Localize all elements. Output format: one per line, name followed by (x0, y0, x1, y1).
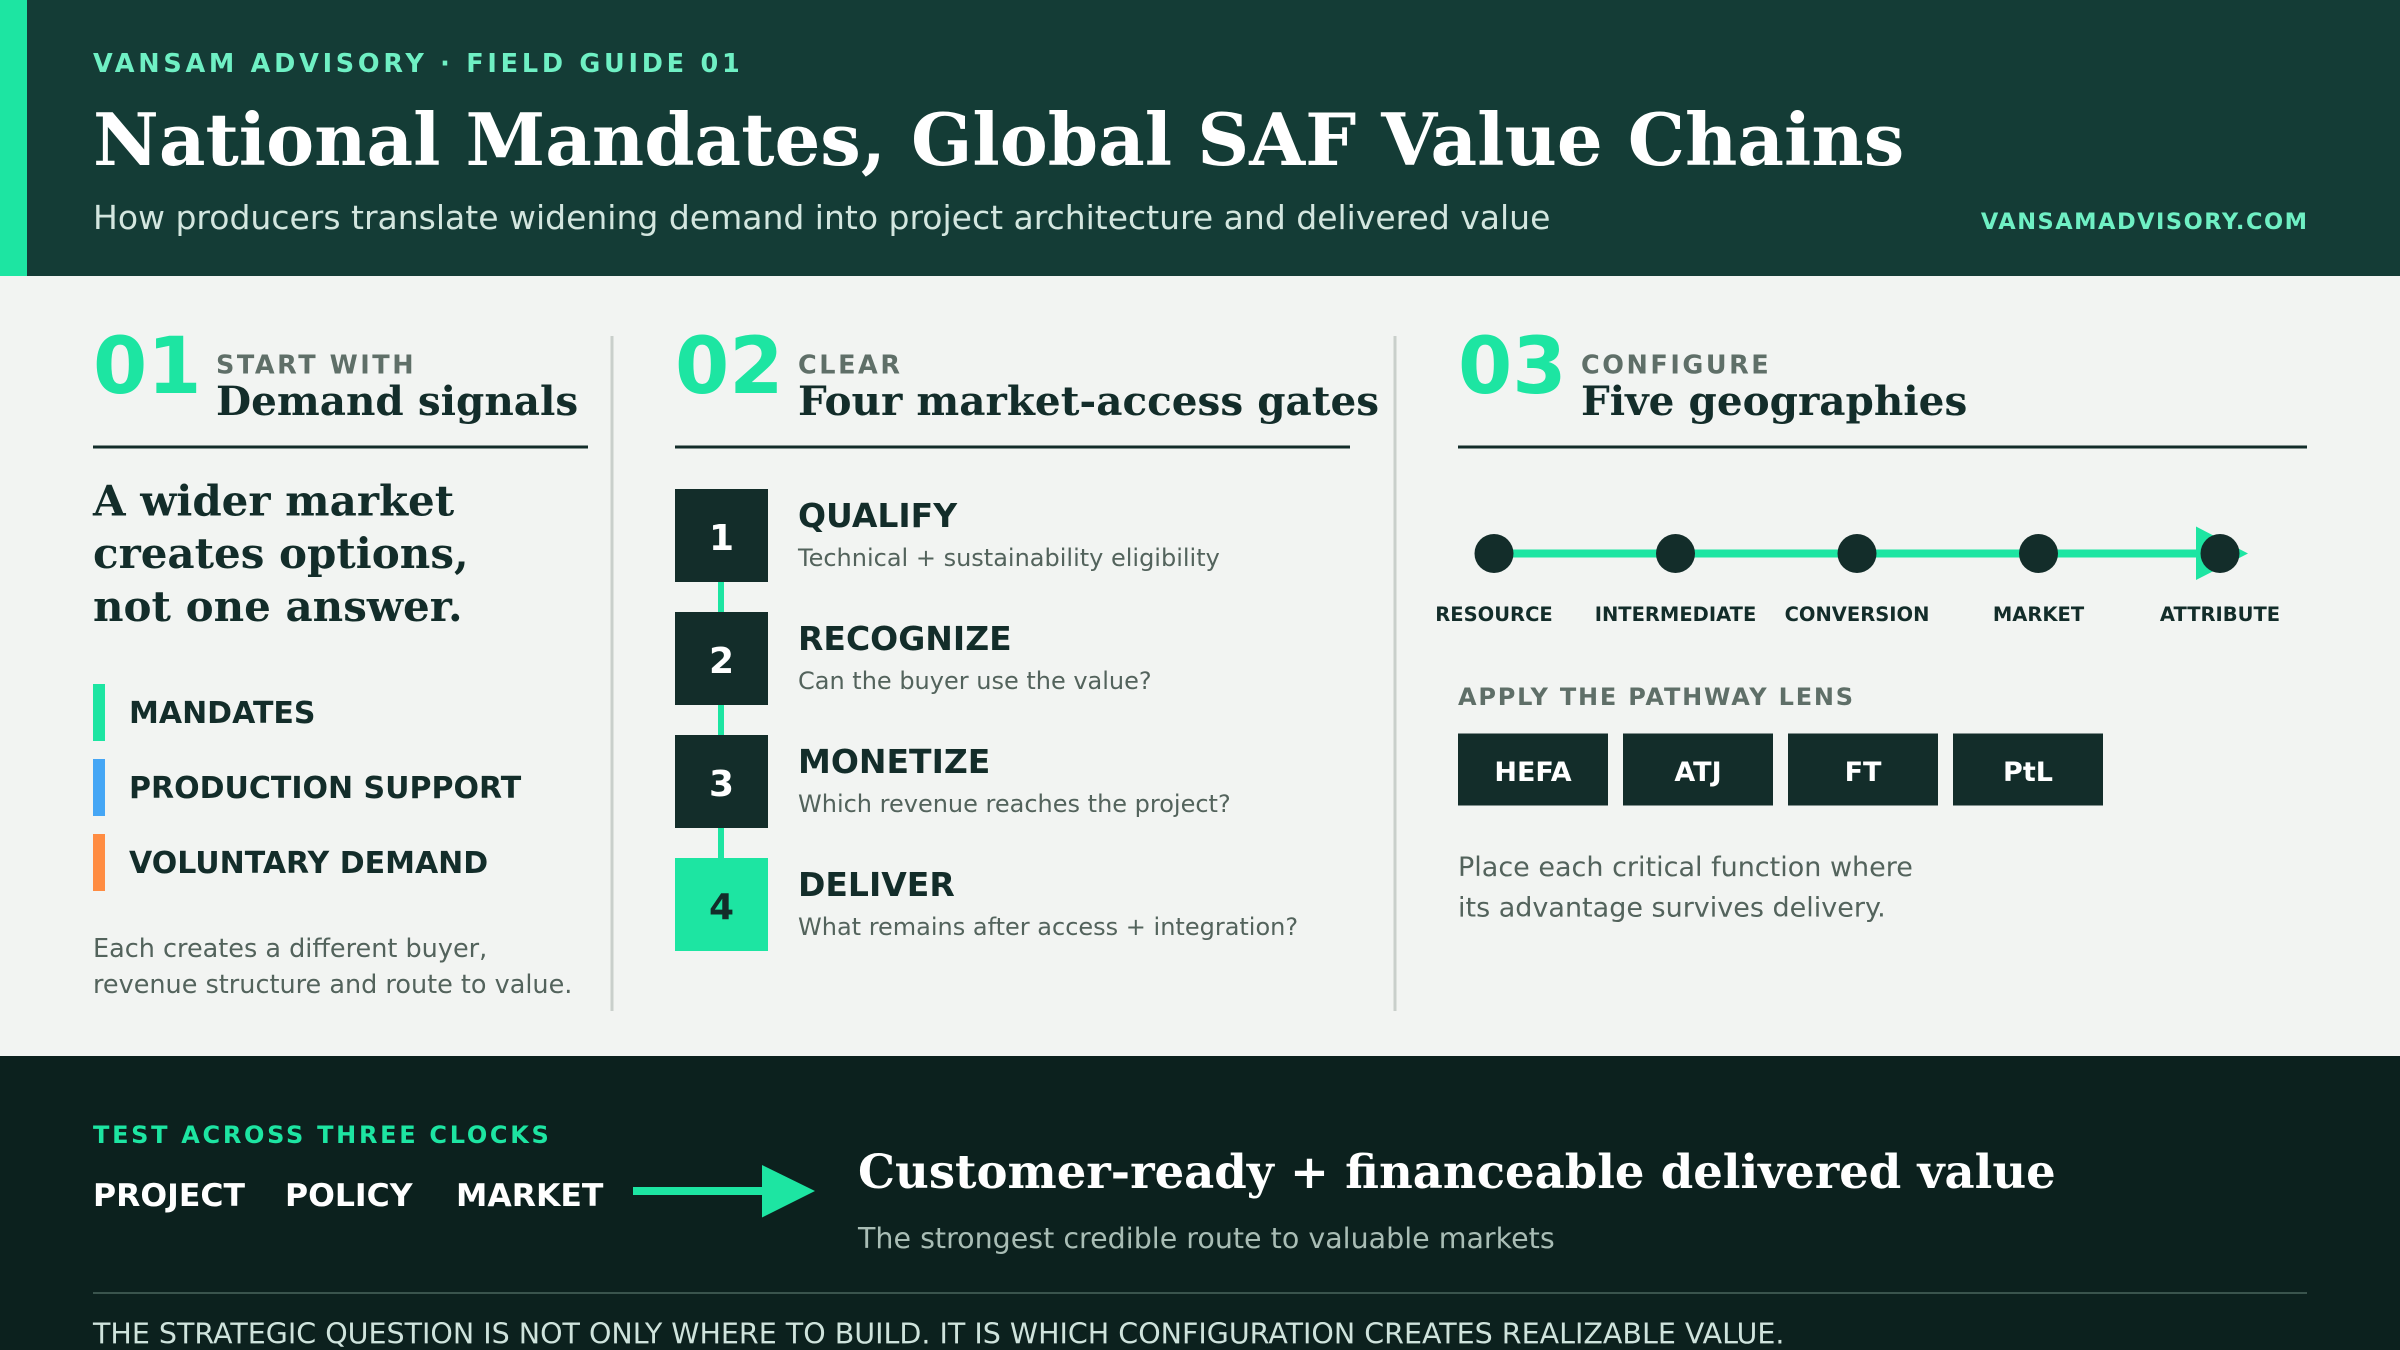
eyebrow: VANSAM ADVISORY · FIELD GUIDE 01 (93, 49, 743, 79)
value chain line (1474, 526, 2248, 580)
gate 1 (675, 489, 1220, 582)
section 02 heading: CLEAR (798, 350, 903, 380)
value chain labels: ATTRIBUTE (2160, 603, 2280, 626)
value chain labels (1435, 603, 2280, 626)
outcome subline: The strongest credible route to valuable markets (857, 1222, 1555, 1255)
clocks label: TEST ACROSS THREE CLOCKS (93, 1121, 552, 1149)
gate 4: 4 (709, 887, 734, 928)
signal: voluntary demand (93, 834, 488, 891)
value chain labels: INTERMEDIATE (1595, 603, 1756, 626)
gate 3: 3 (709, 764, 734, 805)
gate 1: Technical + sustainability eligibility (797, 544, 1220, 572)
statement: A wider market (92, 476, 455, 526)
note: revenue structure and route to value. (93, 970, 572, 1000)
header band (0, 0, 2400, 276)
pathway chips (1458, 734, 2103, 806)
gate 1: 1 (709, 518, 734, 559)
section 03 heading: CONFIGURE (1581, 350, 1771, 380)
gate 3: MONETIZE (798, 742, 990, 781)
gate 2 (675, 612, 1152, 705)
gate 2: 2 (709, 641, 734, 682)
gate 2: RECOGNIZE (798, 619, 1012, 658)
clocks: PROJECT (93, 1178, 245, 1214)
gate 2: Can the buyer use the value? (798, 667, 1152, 695)
signal: mandates (93, 684, 316, 741)
title: National Mandates, Global SAF Value Chains (93, 97, 1904, 182)
section 01 heading: START WITH (216, 350, 416, 380)
footer band (0, 1056, 2400, 1350)
section 03 heading: 03 (1458, 322, 1567, 412)
website: VANSAMADVISORY.COM (1981, 209, 2308, 235)
subtitle: How producers translate widening demand into project architecture and delivered value (93, 198, 1550, 237)
clocks: MARKET (456, 1178, 604, 1214)
value chain labels: MARKET (1993, 603, 2085, 626)
strategic question: THE STRATEGIC QUESTION IS NOT ONLY WHERE TO BUILD. IT IS WHICH CONFIGURATION CREATES REALIZABLE VALUE. (92, 1318, 1784, 1350)
clocks: POLICY (285, 1178, 414, 1214)
pathway chips: FT (1845, 757, 1882, 788)
pathway chips: ATJ (1674, 757, 1722, 788)
section 01 heading: 01 (93, 322, 202, 412)
statement: creates options, (93, 529, 469, 578)
signal: production support: PRODUCTION SUPPORT (129, 771, 522, 806)
panel: demand signals (92, 322, 588, 1000)
panel: five geographies (1435, 322, 2307, 924)
section 03 heading (1458, 322, 2307, 448)
gate 1: QUALIFY (798, 496, 958, 535)
gate 3 (675, 735, 1231, 828)
gate 4: What remains after access + integration? (798, 913, 1298, 941)
pathway chips: PtL (2003, 757, 2053, 788)
statement: not one answer. (93, 582, 463, 631)
panel: market-access gates (675, 322, 1379, 951)
value chain labels: RESOURCE (1435, 603, 1553, 626)
value chain labels: CONVERSION (1785, 603, 1929, 626)
section 01 heading: Demand signals (216, 377, 578, 425)
gate 3: Which revenue reaches the project? (798, 790, 1231, 818)
pathway note: its advantage survives delivery. (1458, 892, 1886, 924)
section 01 heading (93, 322, 588, 448)
gate 4 (675, 858, 1298, 951)
pathway note: Place each critical function where (1458, 852, 1913, 883)
outcome headline: Customer-ready + financeable delivered value (858, 1144, 2056, 1199)
accent bar (0, 0, 27, 276)
signal: voluntary demand: VOLUNTARY DEMAND (129, 846, 488, 881)
section 02 heading: Four market-access gates (798, 377, 1379, 425)
arrow (633, 1165, 815, 1218)
pathway chips: HEFA (1494, 757, 1572, 788)
section 02 heading: 02 (675, 322, 784, 412)
section 03 heading: Five geographies (1581, 377, 1967, 425)
note: Each creates a different buyer, (93, 934, 487, 964)
pathway label: APPLY THE PATHWAY LENS (1458, 683, 1855, 711)
signal: production support (93, 759, 522, 816)
clocks (93, 1178, 604, 1214)
gate 4: DELIVER (798, 865, 955, 904)
section 02 heading (675, 322, 1379, 448)
signal: mandates: MANDATES (129, 696, 316, 731)
